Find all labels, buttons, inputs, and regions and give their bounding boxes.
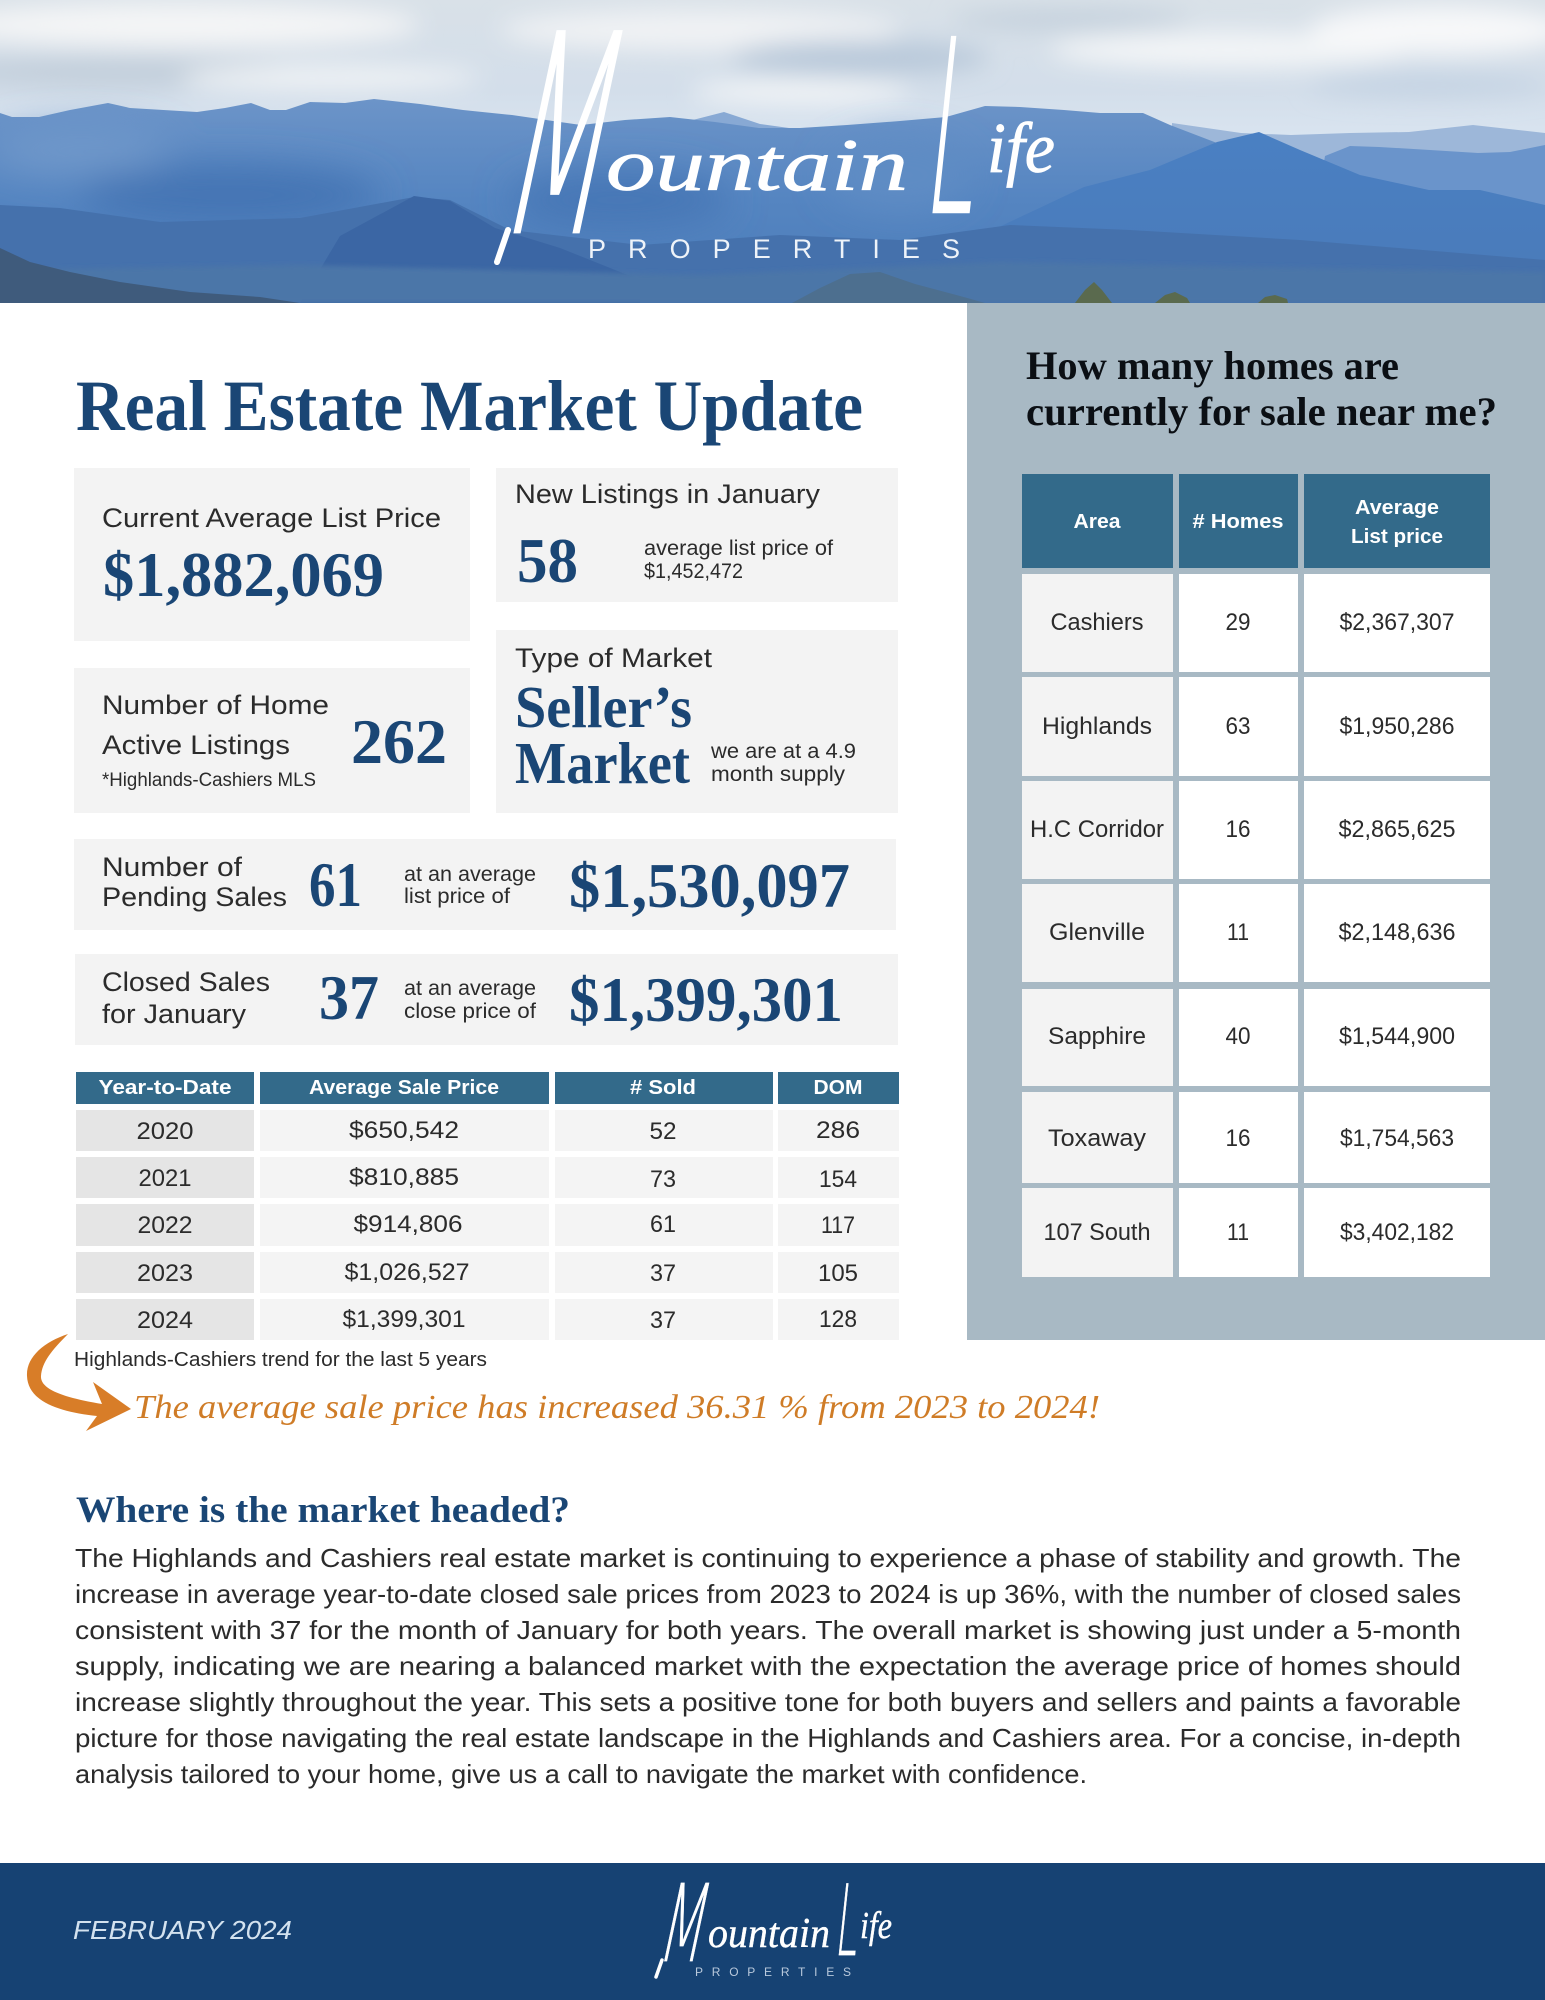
row: Glenville: $2,148,636 bbox=[1338, 919, 1456, 946]
row: Toxaway: 16 bbox=[1226, 1125, 1250, 1152]
shaded mountain slopes bbox=[0, 128, 970, 230]
row 2021: 154 bbox=[819, 1166, 857, 1193]
row: 107 South: $3,402,182 bbox=[1340, 1219, 1454, 1246]
row: H.C Corridor: H.C Corridor bbox=[1030, 816, 1164, 843]
right middle ridge bbox=[1324, 145, 1545, 205]
footer logo: M bbox=[650, 1864, 722, 1987]
table header: DOM bbox=[814, 1077, 862, 1099]
triangular peak bbox=[1002, 132, 1545, 260]
row: Toxaway: Toxaway bbox=[1048, 1125, 1146, 1152]
row 2023: 37 bbox=[650, 1260, 676, 1287]
row 2023: 105 bbox=[818, 1260, 858, 1287]
row 2021: 2021 bbox=[138, 1165, 192, 1192]
card: pending sales: Pending Sales bbox=[102, 882, 287, 912]
heading: where is the market headed: Where is the market headed? bbox=[76, 1490, 570, 1531]
text block: market outlook: consistent with 37 for the month of January for both years. The overall market is showing just under a 5-month bbox=[75, 1615, 1461, 1645]
card: pending sales bbox=[74, 839, 896, 930]
row 2022: 2022 bbox=[138, 1212, 192, 1239]
row: Cashiers: $2,367,307 bbox=[1340, 609, 1454, 636]
row: Toxaway: $1,754,563 bbox=[1340, 1125, 1454, 1152]
card: pending sales: Number of bbox=[102, 852, 243, 882]
row 2023 bbox=[76, 1252, 899, 1293]
row 2020: 2020 bbox=[136, 1118, 194, 1145]
header photo: blue mountains and cloudy sky bbox=[0, 0, 1545, 303]
card: current average list price: Current Average List Price bbox=[102, 503, 441, 533]
year-to-date table bbox=[76, 1072, 899, 1340]
footer logo: PROPERTIES bbox=[695, 1965, 851, 1979]
lower foothills bbox=[0, 197, 1545, 303]
row: Sapphire bbox=[1022, 989, 1490, 1086]
card: new listings in January: $1,452,472 bbox=[644, 560, 743, 583]
panel heading: currently for sale near me? bbox=[1026, 389, 1497, 434]
row: Toxaway bbox=[1022, 1092, 1490, 1183]
row: Sapphire: $1,544,900 bbox=[1339, 1023, 1455, 1050]
row: Cashiers bbox=[1022, 574, 1490, 672]
card: closed sales: for January bbox=[102, 999, 247, 1029]
text block: market outlook: supply, indicating we are nearing a balanced market with the expectation the average price of homes should bbox=[75, 1651, 1461, 1681]
row 2021: $810,885 bbox=[349, 1164, 459, 1191]
card: closed sales: at an average bbox=[404, 977, 536, 1000]
panel: homes for sale bbox=[967, 303, 1545, 1340]
row 2022: 61 bbox=[650, 1211, 676, 1238]
card: pending sales: list price of bbox=[404, 885, 510, 908]
card: active listings: 262 bbox=[351, 707, 447, 777]
card: active listings: Number of Home bbox=[102, 690, 329, 720]
row 2021: 73 bbox=[650, 1166, 676, 1193]
tree tops bbox=[1075, 282, 1288, 303]
card: active listings bbox=[74, 668, 470, 813]
text block: market outlook: picture for those navigating the real estate landscape in the Highlands and Cashiers area. For a concise, in-depth bbox=[75, 1723, 1461, 1753]
row 2024: 37 bbox=[650, 1307, 676, 1334]
row 2020: 52 bbox=[650, 1118, 676, 1145]
panel heading: How many homes are bbox=[1026, 343, 1399, 388]
logo script letters ife: ife bbox=[987, 108, 1055, 188]
row: Cashiers: Cashiers bbox=[1050, 609, 1144, 636]
row 2020: 286 bbox=[816, 1117, 860, 1144]
card: pending sales: $1,530,097 bbox=[569, 851, 850, 921]
homes table header: Average bbox=[1355, 497, 1439, 519]
table header: Average Sale Price bbox=[309, 1077, 499, 1099]
row 2024: 128 bbox=[819, 1306, 857, 1333]
row: Cashiers: 29 bbox=[1226, 609, 1250, 636]
homes table header bbox=[1022, 474, 1490, 568]
row: Highlands bbox=[1022, 677, 1490, 776]
card: type of market: Type of Market bbox=[515, 643, 713, 673]
logo tagline PROPERTIES: PROPERTIES bbox=[588, 234, 960, 264]
logo: Mountain Life Properties bbox=[481, 0, 1055, 297]
row: Glenville: 11 bbox=[1227, 919, 1249, 946]
small centre peak bbox=[694, 112, 788, 128]
card: active listings: *Highlands-Cashiers MLS bbox=[102, 770, 316, 791]
row: Highlands: 63 bbox=[1226, 713, 1250, 740]
card: type of market bbox=[496, 630, 898, 813]
card: active listings: Active Listings bbox=[102, 730, 290, 760]
row: Sapphire: 40 bbox=[1226, 1023, 1250, 1050]
card: current average list price: $1,882,069 bbox=[103, 540, 384, 610]
main ridge bbox=[0, 99, 1216, 245]
row 2024: $1,399,301 bbox=[342, 1306, 466, 1333]
row: H.C Corridor: 16 bbox=[1226, 816, 1250, 843]
text block: market outlook: increase slightly throughout the year. This sets a positive tone for both buyers and sellers and paints a favorable bbox=[75, 1687, 1461, 1717]
homes table header: List price bbox=[1351, 526, 1443, 548]
row: H.C Corridor: $2,865,625 bbox=[1338, 816, 1456, 843]
row 2021 bbox=[76, 1157, 899, 1198]
text block: market outlook: increase in average year-to-date closed sale prices from 2023 to 2024 is up 36%, with the number of closed sales bbox=[75, 1579, 1461, 1609]
row 2020: $650,542 bbox=[349, 1117, 459, 1144]
card: closed sales: close price of bbox=[404, 1000, 536, 1023]
table header: # Sold bbox=[630, 1077, 696, 1099]
row: 107 South: 11 bbox=[1227, 1219, 1249, 1246]
card: current average list price bbox=[74, 468, 470, 641]
card: type of market: we are at a 4.9 bbox=[710, 740, 856, 763]
card: type of market: Seller’s bbox=[515, 674, 692, 740]
card: closed sales bbox=[75, 954, 898, 1045]
table caption: Highlands-Cashiers trend for the last 5 years bbox=[74, 1349, 487, 1371]
card: new listings in January: 58 bbox=[517, 526, 578, 596]
card: new listings in January: New Listings in January bbox=[515, 479, 821, 509]
footer logo bbox=[650, 1864, 892, 1987]
row: 107 South: 107 South bbox=[1044, 1219, 1150, 1246]
dark foreground hill, left bbox=[0, 248, 300, 303]
text block: market outlook: analysis tailored to your home, give us a call to navigate the market with confidence. bbox=[75, 1759, 1087, 1789]
row 2022: $914,806 bbox=[354, 1211, 462, 1238]
row: Highlands: Highlands bbox=[1042, 713, 1152, 740]
card: closed sales: 37 bbox=[319, 963, 379, 1033]
row 2020 bbox=[76, 1110, 899, 1151]
row 2024 bbox=[76, 1299, 899, 1340]
homes table header: Area bbox=[1074, 511, 1121, 533]
row 2022 bbox=[76, 1204, 899, 1246]
card: pending sales: at an average bbox=[404, 863, 536, 886]
title: Real Estate Market Update bbox=[76, 366, 863, 446]
row 2024: 2024 bbox=[137, 1307, 193, 1334]
text block: market outlook bbox=[75, 1543, 1461, 1789]
card: new listings in January: average list price of bbox=[644, 537, 833, 560]
row 2023: $1,026,527 bbox=[344, 1259, 470, 1286]
homes table header: # Homes bbox=[1192, 511, 1284, 533]
row: Sapphire: Sapphire bbox=[1048, 1023, 1146, 1050]
card: new listings in January bbox=[496, 468, 898, 602]
row: H.C Corridor bbox=[1022, 781, 1490, 879]
text block: market outlook: The Highlands and Cashiers real estate market is continuing to experience a phase of stability and growth. The bbox=[75, 1543, 1461, 1573]
dark foreground hill, centre bbox=[792, 272, 985, 303]
arrow: orange curved arrow bbox=[27, 1334, 131, 1431]
card: pending sales: 61 bbox=[309, 850, 362, 920]
row 2023: 2023 bbox=[137, 1260, 193, 1287]
table header: Year-to-Date bbox=[98, 1077, 232, 1099]
row: Glenville: Glenville bbox=[1049, 919, 1145, 946]
row 2022: 117 bbox=[821, 1212, 855, 1239]
footer logo: ountain bbox=[708, 1911, 830, 1957]
card: closed sales: Closed Sales bbox=[102, 967, 270, 997]
row: 107 South bbox=[1022, 1188, 1490, 1277]
footer logo: L bbox=[832, 1864, 866, 1978]
card: type of market: month supply bbox=[711, 763, 846, 786]
footer logo: ife bbox=[860, 1905, 892, 1947]
row: Glenville bbox=[1022, 884, 1490, 982]
footer band bbox=[0, 1863, 1545, 2000]
table header bbox=[76, 1072, 899, 1104]
footer date: FEBRUARY 2024 bbox=[73, 1915, 292, 1945]
panel heading bbox=[1026, 343, 1497, 434]
logo script word ountain: ountain bbox=[606, 125, 908, 207]
card: type of market: Market bbox=[515, 730, 690, 796]
callout: price increase: The average sale price has increased 36.31 % from 2023 to 2024! bbox=[134, 1389, 1100, 1426]
far right ridge bbox=[1172, 123, 1545, 160]
logo flourish under M bbox=[497, 230, 508, 262]
row: Highlands: $1,950,286 bbox=[1340, 713, 1454, 740]
card: closed sales: $1,399,301 bbox=[569, 965, 843, 1035]
